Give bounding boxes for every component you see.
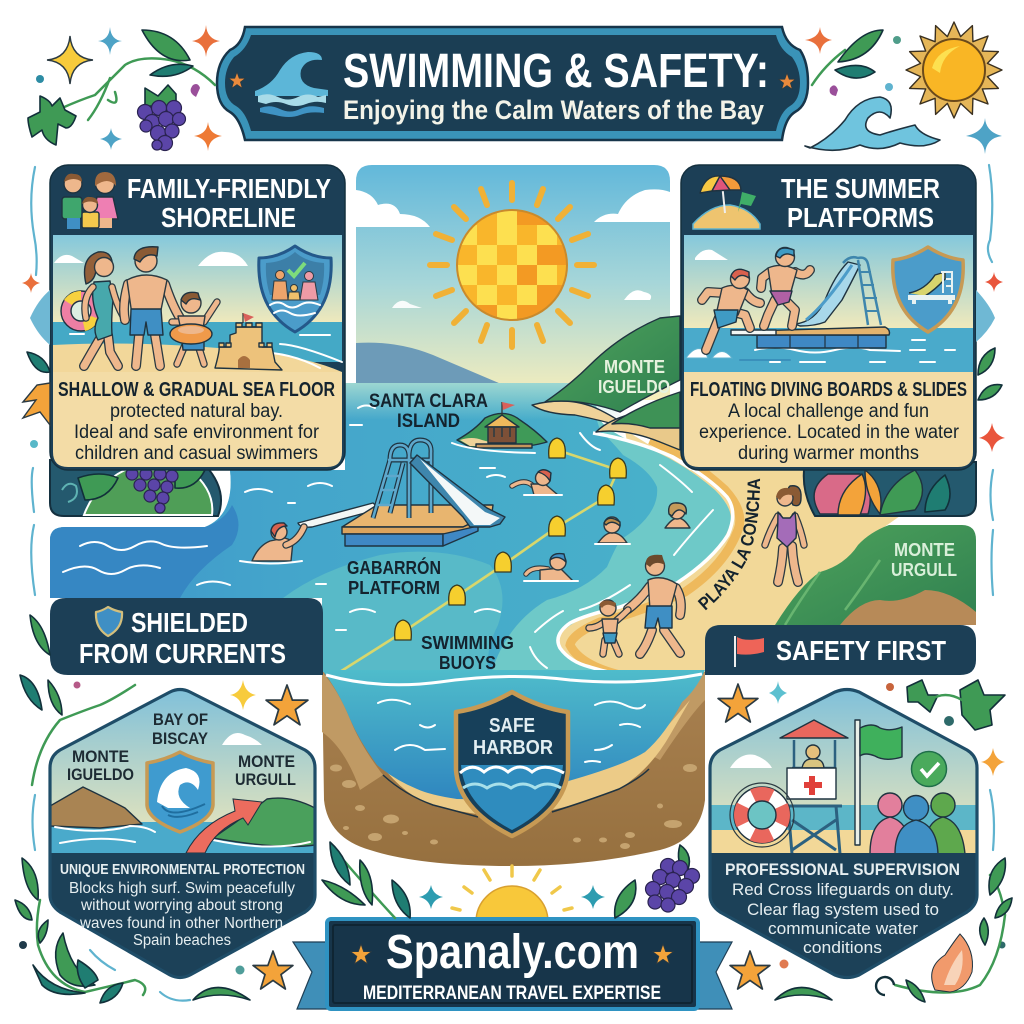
heading: PLATFORMS: [787, 202, 934, 233]
heading: [781, 173, 940, 233]
label: santa clara island: [369, 391, 488, 432]
map labels: MONTE: [72, 747, 129, 766]
body text: UNIQUE ENVIRONMENTAL PROTECTION: [60, 861, 305, 878]
hexagon background: [52, 691, 314, 822]
text box: A local challenge and fun: [728, 401, 929, 422]
title: SWIMMING & SAFETY:: [343, 45, 769, 98]
panel: family-friendly shoreline: [50, 165, 345, 516]
gabarron platform with slide: [298, 440, 505, 546]
earth bank: [322, 672, 705, 866]
heading: SHIELDED: [131, 607, 248, 638]
text box: [53, 372, 342, 467]
cloud: [222, 733, 262, 745]
igueldo hill: [50, 787, 142, 828]
text box: experience. Located in the water: [699, 422, 960, 443]
lower corner with grapes: [50, 460, 221, 516]
beach bands: [712, 805, 976, 830]
safety shield icon: [259, 246, 331, 332]
father: [124, 247, 180, 366]
heading: FAMILY-FRIENDLY: [127, 173, 331, 204]
heading: [127, 173, 331, 233]
footer banner: spanaly.com: [293, 919, 732, 1009]
bowl water: [322, 670, 705, 800]
sea: [50, 383, 731, 677]
body text: without worrying about strong: [80, 897, 283, 914]
label: monte urgull: MONTE: [894, 540, 955, 560]
decoration: top-right sun, leaves and wave: [805, 22, 1002, 154]
decoration: side ornaments: [22, 165, 1005, 655]
label: monte igueldo: IGUELDO: [598, 377, 670, 397]
decoration: lower-left foliage and stars: [15, 675, 308, 1003]
slide shield icon: [893, 247, 963, 332]
monte urgull panel: [775, 525, 976, 625]
text box: [684, 372, 973, 467]
text box: children and casual swimmers: [75, 443, 318, 464]
icon: wave: [255, 52, 328, 117]
text box: protected natural bay.: [110, 401, 283, 422]
icon: small shield: [96, 607, 122, 636]
heading: SHORELINE: [161, 202, 296, 233]
body text: waves found in other Northern: [79, 915, 283, 932]
body text: [60, 861, 305, 949]
father and child on the beach: [589, 555, 681, 654]
decoration: bottom-centre leaves and grapes: [322, 842, 700, 918]
platform illustration: [684, 235, 973, 373]
card frame: [681, 165, 976, 470]
body text: conditions: [803, 938, 882, 957]
stars: [228, 72, 796, 89]
woman walking on the beach: [765, 486, 804, 582]
check badge: [912, 752, 946, 786]
pebbles: [330, 764, 697, 849]
label: monte urgull: URGULL: [891, 560, 957, 580]
heading: FROM CURRENTS: [79, 638, 286, 669]
swimmer running on platform: [761, 248, 810, 326]
label: monte igueldo: [598, 357, 670, 397]
green flag: [855, 720, 902, 845]
label: swimming buoys: SWIMMING: [421, 633, 514, 653]
label: safe harbor: SAFE: [489, 715, 535, 737]
sand crescent: [372, 700, 690, 818]
swimmer stepping off board: [702, 269, 760, 350]
card frame: [50, 165, 345, 470]
panel: safety first header: [705, 625, 976, 675]
label: santa clara island: SANTA CLARA: [369, 391, 488, 412]
bowl wave marks: [378, 700, 645, 762]
monte igueldo headland: [532, 316, 680, 450]
body text: PROFESSIONAL SUPERVISION: [725, 860, 960, 879]
heading: THE SUMMER: [781, 173, 940, 204]
label: safe harbor: HARBOR: [473, 737, 554, 759]
beach illustration: [53, 235, 342, 372]
label: swimming buoys: BUOYS: [439, 653, 496, 673]
map labels: BISCAY: [152, 729, 209, 748]
water marks: [55, 826, 310, 847]
slide and ladder: [795, 257, 881, 326]
hexagon outline: [50, 690, 315, 978]
map labels: BAY OF: [153, 710, 208, 729]
label: gabarron platform: PLATFORM: [348, 578, 440, 598]
santa clara island: [452, 402, 547, 453]
lifeguard tower: [780, 720, 848, 854]
wave shield: [147, 752, 213, 832]
map labels: [67, 710, 296, 789]
urgull hill: [213, 798, 315, 846]
label: safe harbor: [473, 715, 554, 759]
lower corner with flowers: [804, 462, 976, 516]
banner plate: [327, 919, 698, 1009]
mother with swim ring: [61, 252, 126, 366]
ribbon tails: [293, 942, 732, 1009]
label: santa clara island: ISLAND: [397, 411, 460, 432]
body text: Red Cross lifeguards on duty.: [732, 880, 954, 899]
safe harbor cross-section: [322, 670, 705, 866]
child with float: [170, 292, 217, 364]
brand name: Spanaly.com: [386, 926, 639, 979]
icon: red flag: [735, 636, 764, 667]
deeper blue water: [50, 383, 657, 677]
panel: summer platforms: [681, 165, 976, 516]
label: monte urgull: [891, 540, 957, 580]
map labels: URGULL: [235, 770, 296, 789]
life ring: [730, 783, 794, 847]
body text: Blocks high surf. Swim peacefully: [69, 880, 295, 897]
cloud: [730, 755, 772, 768]
buoy line and buoys: [335, 438, 626, 675]
body text: communicate water: [768, 919, 918, 938]
body text: Spain beaches: [133, 932, 231, 949]
label: swimming buoys: [421, 633, 514, 673]
panel: shielded from currents header: [50, 598, 323, 675]
sky: [356, 165, 670, 400]
label: monte igueldo: MONTE: [604, 357, 665, 377]
hexagon outline: [710, 690, 977, 978]
red current arrow: [186, 799, 262, 853]
label: gabarron platform: [347, 557, 441, 598]
map labels: IGUELDO: [67, 765, 134, 784]
text box: SHALLOW & GRADUAL SEA FLOOR: [58, 379, 335, 401]
sea wave marks: [63, 406, 713, 668]
tagline: MEDITERRANEAN TRAVEL EXPERTISE: [363, 983, 661, 1004]
panel: professional supervision hexagon: [710, 687, 977, 978]
sand under shoreline: [540, 430, 900, 678]
text box: during warmer months: [738, 443, 919, 464]
text area: [710, 853, 977, 978]
body text: Clear flag system used to: [747, 900, 939, 919]
stars: [351, 944, 673, 964]
subtitle: Enjoying the Calm Waters of the Bay: [343, 95, 764, 125]
sandcastle: [215, 313, 282, 370]
swimmers in the water: [240, 470, 690, 581]
family header icon: [62, 172, 118, 229]
scene water: [50, 822, 315, 855]
hexagon background: [712, 691, 976, 805]
platform: [731, 327, 890, 348]
beach umbrella island icon: [693, 176, 760, 229]
body text: [725, 860, 960, 957]
clouds: [356, 189, 670, 308]
footer sun: [452, 866, 572, 958]
label: playa la concha: PLAYA LA CONCHA: [698, 478, 760, 610]
heading: [79, 607, 286, 669]
central bay scene: [50, 165, 976, 673]
text box: Ideal and safe environment for: [74, 422, 320, 443]
text area: [50, 853, 315, 978]
panel: unique environmental protection hexagon: [50, 687, 315, 978]
title banner: [217, 27, 808, 140]
distant mountain: [356, 343, 520, 392]
decoration: lower-right foliage and stars: [718, 680, 1012, 1002]
decoration: top-left vine and grapes: [28, 30, 215, 150]
safe harbor shield: [456, 692, 568, 836]
large sun: [430, 183, 594, 347]
label: gabarron platform: GABARRÓN: [347, 557, 441, 578]
visitors group: [870, 793, 965, 854]
heading: SAFETY FIRST: [776, 635, 946, 666]
map labels: MONTE: [238, 752, 295, 771]
decoration: top-left stars: [36, 25, 222, 151]
